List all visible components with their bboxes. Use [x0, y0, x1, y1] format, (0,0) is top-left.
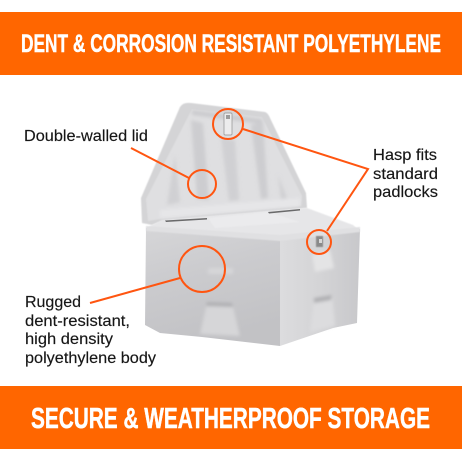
storage box product image — [141, 103, 360, 346]
circle: front hasp — [307, 230, 331, 254]
top banner — [0, 12, 462, 75]
label: double-walled lid: Double-walled lid — [24, 128, 148, 145]
callout: body line — [90, 278, 180, 303]
box body — [145, 226, 360, 346]
label: body: high density — [25, 331, 113, 348]
label: hasp: padlocks — [373, 184, 438, 201]
callout lines — [90, 109, 368, 303]
label: hasp: standard — [373, 166, 438, 183]
bottom banner — [0, 386, 462, 449]
open lid — [141, 103, 307, 225]
label: body: dent-resistant, — [25, 313, 130, 330]
circle: lid hasp — [213, 109, 243, 139]
label: body: Rugged — [25, 294, 81, 311]
label: body: polyethylene body — [25, 350, 156, 367]
body recess details — [200, 250, 335, 336]
lid hasp — [224, 113, 232, 135]
callout: double-walled lid line — [131, 148, 189, 178]
circle: body — [179, 246, 225, 292]
circle: lid wall — [188, 170, 216, 198]
label: body — [25, 294, 156, 367]
label: hasp: Hasp fits — [373, 147, 437, 164]
callout: hasp line — [243, 129, 368, 231]
front hasp — [316, 236, 323, 247]
label: hasp — [373, 147, 438, 201]
box top rim — [146, 208, 359, 238]
